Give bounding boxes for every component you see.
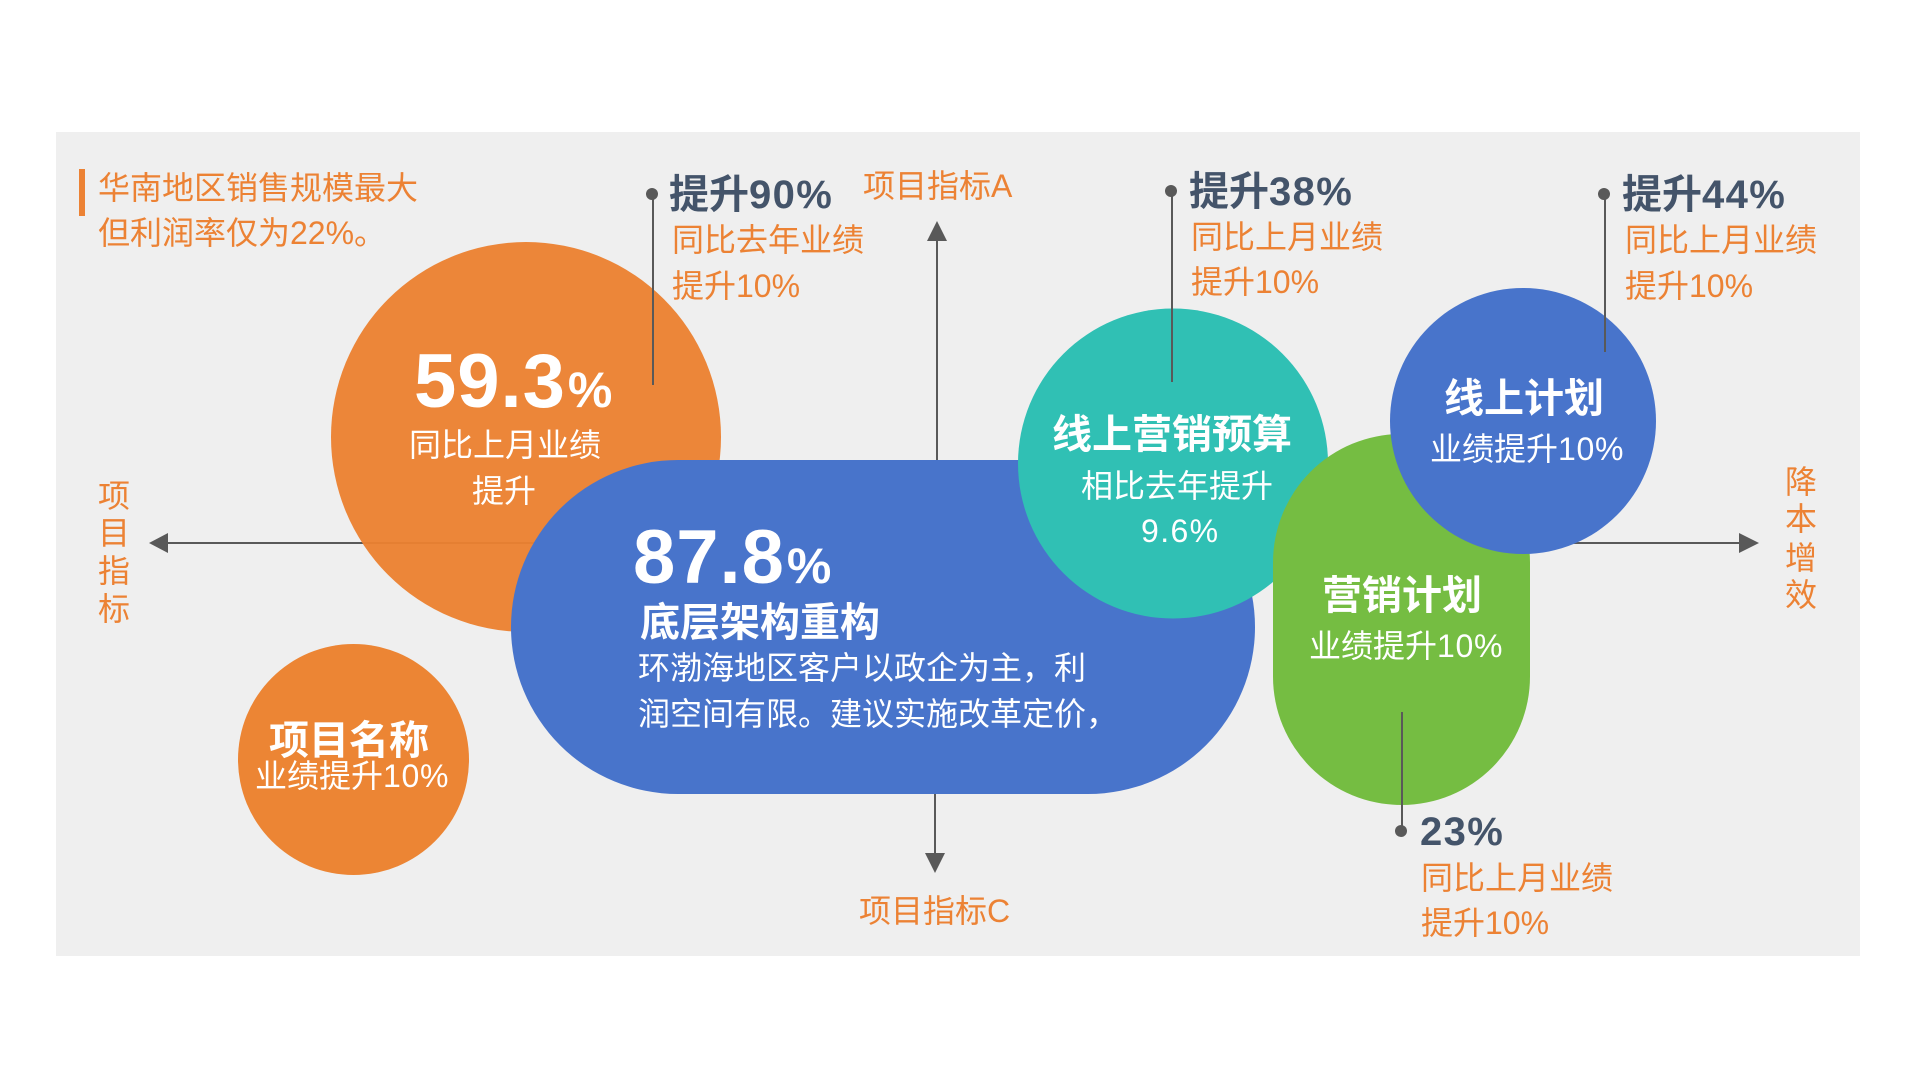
circle: small orange [238, 644, 469, 875]
text: green pill: 业绩提升10% [1309, 628, 1503, 664]
circle: blue top right [1390, 288, 1656, 554]
text block: top-left note: 但利润率仅为22%。 [98, 215, 386, 251]
axis label: 项目指标A: 项目指标A [863, 168, 1013, 204]
text: blue top-right circle: 业绩提升10% [1430, 431, 1624, 467]
text: green pill [1309, 574, 1503, 664]
text: teal circle [1052, 413, 1292, 549]
axis label: right vertical 降本增效: 增 [1785, 540, 1817, 576]
text: teal circle: 9.6% [1141, 513, 1220, 549]
callout: 23%: 提升10% [1421, 905, 1549, 941]
callout: 提升44% [1598, 173, 1817, 352]
callout: 23%: 同比上月业绩 [1421, 860, 1613, 896]
text: central blue pill: 润空间有限。建议实施改革定价， [638, 696, 1118, 732]
circle: large orange [331, 242, 721, 632]
axis label: right vertical 降本增效: 效 [1785, 577, 1817, 613]
panel: grey background [56, 132, 1860, 956]
text: blue top-right circle: 线上计划 [1444, 377, 1604, 421]
arrow: horizontal axis [149, 533, 1759, 553]
text: teal circle: 相比去年提升 [1081, 468, 1273, 504]
callout: 提升90%: 提升90% [669, 173, 833, 217]
callout: 提升90% [646, 173, 864, 385]
text: large orange circle: 59.3% [414, 339, 612, 424]
pill: central blue [511, 460, 1255, 794]
text block: top-left note [79, 169, 418, 251]
text: small orange circle [255, 719, 449, 794]
pill: green [1273, 434, 1530, 805]
callout: 提升90%: 提升10% [672, 268, 800, 304]
callout: 提升90%: 同比去年业绩 [672, 222, 864, 258]
circle: teal [1018, 308, 1328, 618]
text block: top-left note: 华南地区销售规模最大 [98, 170, 418, 206]
callout: 提升38% [1165, 170, 1383, 382]
text: large orange circle [409, 339, 612, 509]
text: central blue pill: 底层架构重构 [640, 601, 880, 645]
axis label: left vertical 项目指标: 项 [98, 478, 130, 514]
callout: 23% [1395, 712, 1613, 941]
text: green pill: 营销计划 [1322, 574, 1482, 618]
axis label: right vertical 降本增效: 降 [1785, 464, 1817, 500]
callout: 提升38%: 同比上月业绩 [1191, 219, 1383, 255]
text: teal circle: 线上营销预算 [1052, 413, 1292, 457]
callout: 23%: 23% [1420, 810, 1504, 854]
text: small orange circle: 业绩提升10% [255, 758, 449, 794]
axis label: right vertical 降本增效 [1785, 464, 1817, 613]
arrow: vertical axis down [925, 792, 945, 873]
callout: 提升38%: 提升38% [1189, 170, 1353, 214]
text: central blue pill: 环渤海地区客户以政企为主，利 [638, 650, 1086, 686]
axis label: left vertical 项目指标: 目 [98, 515, 130, 551]
text: blue top-right circle [1430, 377, 1624, 467]
axis label: left vertical 项目指标: 标 [98, 591, 130, 627]
arrow: vertical axis up [927, 221, 947, 462]
axis label: right vertical 降本增效: 本 [1785, 501, 1817, 537]
text: central blue pill [633, 515, 1118, 732]
text: large orange circle: 同比上月业绩 [409, 427, 601, 463]
axis label: left vertical 项目指标: 指 [98, 553, 130, 589]
callout: 提升44%: 提升44% [1622, 173, 1786, 217]
axis label: 项目指标C: 项目指标C [859, 893, 1010, 929]
text: small orange circle: 项目名称 [269, 719, 429, 763]
callout: 提升44%: 同比上月业绩 [1625, 222, 1817, 258]
callout: 提升38%: 提升10% [1191, 264, 1319, 300]
callout: 提升44%: 提升10% [1625, 268, 1753, 304]
text: large orange circle: 提升 [472, 473, 536, 509]
text: central blue pill: 87.8% [633, 515, 831, 600]
axis label: left vertical 项目指标 [98, 478, 130, 627]
